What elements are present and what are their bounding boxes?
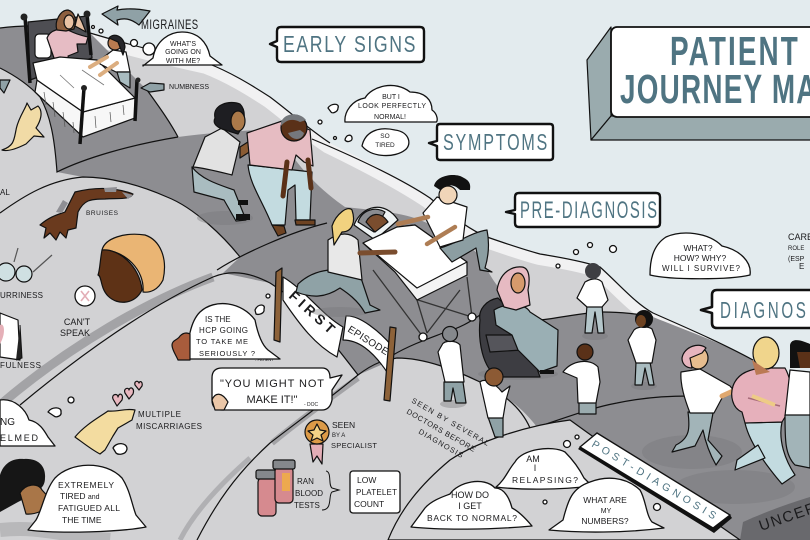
callout: low platelet count: PLATELET <box>356 488 397 497</box>
label: multiple miscarriages: MULTIPLE <box>138 410 181 419</box>
icon: book <box>0 313 22 360</box>
thought bubble: but i look perfectly normal: LOOK PERFECTLY <box>358 103 426 110</box>
thought bubble: what how why will i survive <box>556 233 750 279</box>
label: migraines: MIGRAINES <box>141 16 198 33</box>
note: caregiver role: (ESP <box>788 256 805 263</box>
heading: diagnosis <box>701 290 810 328</box>
icon: hand with hearts <box>48 381 142 454</box>
heading: pre-diagnosis <box>506 193 660 227</box>
label: multiple miscarriages: MISCARRIAGES <box>136 422 202 431</box>
arrow: to migraines <box>102 6 150 25</box>
bubble: is the hcp going to take me seriously <box>172 294 280 362</box>
bubble: is the hcp going to take me seriously: IS THE <box>205 315 231 324</box>
label: seen by several doctors: DOCTORS BEFORE <box>405 407 477 454</box>
bubble: how do i get back to normal: HOW DO <box>451 490 489 500</box>
bubble: extremely tired: EXTREMELY <box>58 480 114 490</box>
thought bubble: what's going on with me: WHAT'S <box>170 41 196 48</box>
bubble: what are my numbers: WHAT ARE <box>583 495 627 505</box>
thought bubble: what's going on with me: WITH ME? <box>166 58 200 65</box>
bubble: extremely tired: THE TIME <box>62 515 102 525</box>
label: can't speak <box>60 317 91 338</box>
bubble: you might not make it: "YOU MIGHT NOT <box>220 378 324 390</box>
icon: glasses <box>0 248 52 282</box>
label: numbness: NUMBNESS <box>169 84 209 91</box>
person: attendant with black hair <box>398 175 492 272</box>
bubble: how do i get back to normal: I GET <box>458 501 482 511</box>
bubble: is the hcp going to take me seriously: - PATIENT <box>255 357 274 362</box>
bubble: extremely tired: FATIGUED ALL <box>58 503 120 513</box>
thought bubble: so tired <box>334 129 409 156</box>
thought bubble: what how why will i survive: HOW? WHY? <box>674 253 726 263</box>
callout: low platelet count: LOW <box>357 475 376 485</box>
heading: pre-diagnosis: PRE-DIAGNOSIS <box>520 198 657 224</box>
thought bubble: what's going on with me <box>92 26 222 66</box>
callout: low platelet count <box>350 471 400 513</box>
label: ran blood tests with brace <box>294 471 339 510</box>
heading: symptoms <box>429 124 553 160</box>
bubble: what are my numbers <box>549 478 664 532</box>
note: caregiver role <box>788 232 810 271</box>
thought bubble: but i look perfectly normal <box>318 85 437 124</box>
banner: first episode: EPISODE <box>345 324 391 358</box>
doctor: white coat, arms crossed <box>628 310 657 390</box>
person: blonde nurse <box>296 209 380 317</box>
banner: first episode <box>274 268 396 401</box>
bubble: is the hcp going to take me seriously: SERIOUSLY ? <box>199 349 255 358</box>
doctor: standing, dark hair top <box>577 263 608 340</box>
label: seen by several doctors: SEEN BY SEVERAL <box>410 396 491 448</box>
title block <box>587 27 810 140</box>
bubble: feeling overwhelmed <box>0 400 55 446</box>
label: seen by a specialist: SPECIALIST <box>331 441 377 450</box>
bubble: you might not make it <box>212 368 342 410</box>
thought bubble: but i look perfectly normal: BUT I <box>382 94 400 101</box>
bubble: feeling overwhelmed: ELMED <box>0 433 38 443</box>
banner: first episode: FIRST <box>286 287 339 337</box>
person: woman with pink headwrap <box>672 345 735 465</box>
thought bubble: what how why will i survive: WHAT? <box>683 243 713 253</box>
callout: low platelet count: COUNT <box>354 499 384 509</box>
bubble: how do i get back to normal: BACK TO NORMAL? <box>427 513 517 523</box>
label: multiple miscarriages <box>136 410 202 431</box>
bottom hill with post-diagnosis questions <box>388 420 740 540</box>
gurney with patient <box>354 207 476 341</box>
bubble: is the hcp going to take me seriously: TO TAKE ME <box>196 337 248 346</box>
sign: post-diagnosis: POST-DIAGNOSIS <box>589 438 718 522</box>
bubble: is the hcp going to take me seriously: HCP GOING <box>199 326 248 335</box>
person: bald man in pink sweater <box>732 337 795 484</box>
label: blurriness: URRINESS <box>0 291 43 300</box>
bubble: extremely tired <box>28 465 146 532</box>
label: seen by a specialist <box>331 420 377 450</box>
label: seen by a specialist: SEEN <box>332 420 355 430</box>
doctor: back view, white coat <box>563 344 600 414</box>
icon: specialist medal <box>305 420 329 464</box>
heading: early signs <box>270 27 424 62</box>
thought bubble: but i look perfectly normal: NORMAL! <box>374 114 406 121</box>
arrow: numbness <box>141 83 164 92</box>
label: can't speak: CAN'T <box>64 317 91 327</box>
person: partner with braids <box>785 340 810 468</box>
label: ran blood tests with brace: BLOOD <box>295 489 323 498</box>
bubble: am i relapsing: RELAPSING? <box>512 475 578 485</box>
title block: PATIENT <box>670 29 798 74</box>
person: man with gray beard <box>247 114 315 236</box>
bubble: am i relapsing: AM <box>526 454 540 464</box>
heading: symptoms: SYMPTOMS <box>443 130 547 156</box>
heading: early signs: EARLY SIGNS <box>283 32 415 58</box>
note: caregiver role: E <box>799 262 804 271</box>
doctor: gray hair back view <box>438 326 466 408</box>
icon: bruised arm <box>40 187 133 240</box>
arrow: left edge <box>0 80 10 93</box>
note: caregiver role: ROLE <box>788 246 804 252</box>
label: ran blood tests with brace: TESTS <box>294 501 320 510</box>
bubble: how do i get back to normal <box>411 481 532 529</box>
bubble: extremely tired: TIRED and <box>60 491 100 501</box>
decoration: thought dots <box>543 435 660 510</box>
bed scene with mother and child <box>20 10 140 144</box>
thought bubble: so tired: TIRED <box>375 142 395 149</box>
bubble: what are my numbers: NUMBERS? <box>581 516 629 526</box>
bubble: you might not make it: MAKE IT!" <box>247 394 298 406</box>
icon: head with hair, can't speak <box>75 234 164 306</box>
caregiver group walking <box>642 337 810 504</box>
label: bruises: BRUISES <box>86 210 119 217</box>
person: tired woman with afro <box>0 459 54 514</box>
label: seen by several doctors: DIAGNOSIS <box>417 427 465 460</box>
label: forgetfulness: FULNESS <box>0 361 41 370</box>
person: woman in hijab on armchair <box>478 267 558 380</box>
thought bubble: what how why will i survive: WILL I SURVIVE? <box>662 264 741 273</box>
icon: blood tubes <box>256 460 295 516</box>
cat <box>2 103 44 151</box>
person: caregiver woman <box>192 103 268 225</box>
bubble: feeling overwhelmed: NG <box>0 417 15 428</box>
bubble: am i relapsing: I <box>534 463 536 473</box>
label: can't speak: SPEAK <box>60 328 90 338</box>
bubble: you might not make it: - DOC <box>304 402 319 408</box>
doctor: brown hair <box>480 368 510 437</box>
label: seen by a specialist: BY A <box>332 433 345 439</box>
bubble: what are my numbers: MY <box>601 508 612 515</box>
thought bubble: what's going on with me: GOING ON <box>165 49 201 56</box>
label: ran blood tests with brace: RAN <box>297 477 314 486</box>
thought bubble: so tired: SO <box>380 133 390 140</box>
bubble: am i relapsing <box>496 449 592 489</box>
label: clipped word ending in al: AL <box>0 188 10 197</box>
